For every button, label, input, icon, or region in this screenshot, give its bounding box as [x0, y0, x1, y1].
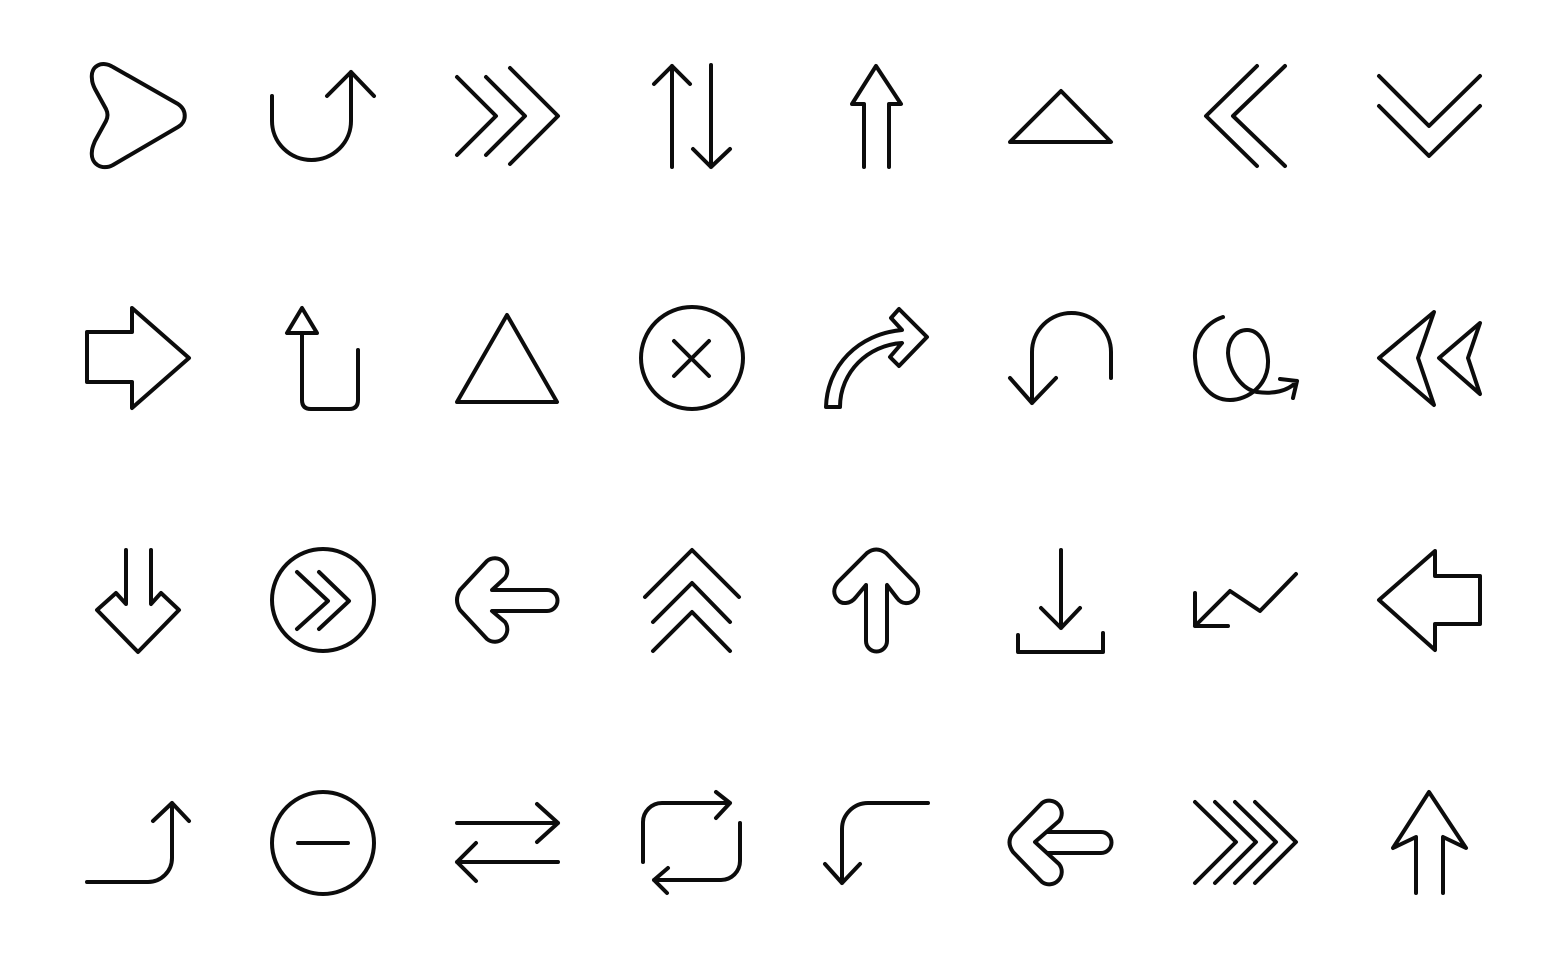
icon: bent down arrow	[825, 803, 928, 883]
icon: rounded left arrow with inner notch	[1010, 801, 1112, 884]
icon: U-turn up arrow	[272, 72, 374, 160]
icon: left block arrow	[1379, 551, 1480, 650]
icon: triple right chevrons	[457, 68, 558, 164]
icon: quadruple right chevrons	[1195, 802, 1296, 883]
icon: down arrow with double shaft	[97, 550, 179, 652]
icon: up and down arrows	[654, 65, 730, 167]
icon: circled minus	[272, 792, 374, 894]
icon: circled cross	[641, 307, 743, 409]
icon: double down chevrons	[1379, 76, 1480, 156]
icon: zigzag down-left arrow	[1195, 574, 1296, 626]
icon: tall up arrow with double shaft	[1393, 792, 1466, 893]
icon: rounded play arrow	[92, 64, 185, 167]
icon: U-turn down arrow	[1010, 313, 1111, 403]
icon: triangle	[457, 315, 557, 402]
icon: repeat arrows	[643, 792, 740, 893]
icon: circled double chevrons	[272, 549, 374, 651]
icon: rounded up arrow	[834, 550, 918, 652]
icon: right block arrow	[87, 308, 189, 408]
icon: rounded left arrow	[457, 558, 558, 642]
icon: triple up chevrons	[645, 550, 739, 651]
icon: download arrow with tray	[1018, 550, 1103, 652]
icon: U-shaped up arrow with triangle head	[287, 308, 358, 409]
icon: up arrow with double shaft	[852, 66, 901, 167]
icon: curved right block arrow	[826, 309, 927, 407]
icon: double left chevrons	[1206, 66, 1285, 166]
icon: bent up arrow	[87, 803, 189, 882]
icon: flat triangle	[1010, 91, 1111, 142]
icon: double left arrowheads	[1379, 312, 1480, 405]
icon: swap arrows	[457, 804, 558, 881]
icon: looping arrow	[1195, 317, 1297, 400]
